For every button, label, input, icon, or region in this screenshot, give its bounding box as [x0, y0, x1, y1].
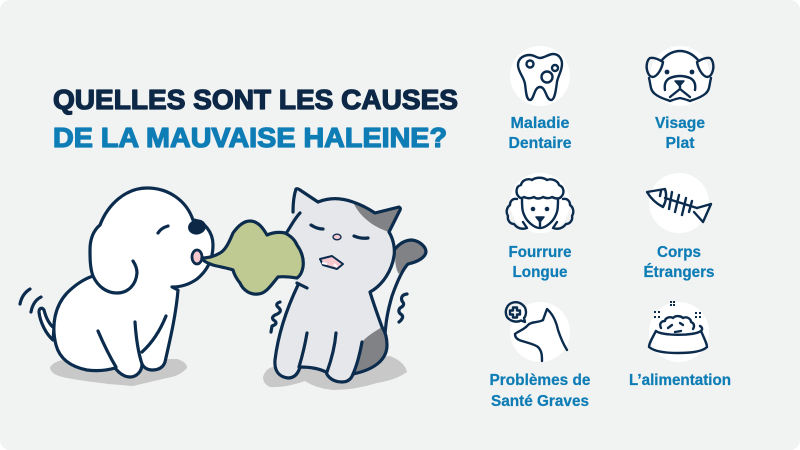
- cat tail: [383, 240, 426, 335]
- icon: tooth: [510, 46, 570, 106]
- label: Corps Étrangers: [644, 244, 715, 281]
- title: QUELLES SONT LES CAUSES: [53, 84, 458, 115]
- title: [53, 84, 458, 153]
- label: Visage Plat: Plat: [666, 135, 695, 152]
- label: Visage Plat: Visage: [655, 115, 705, 132]
- icon: poodle: [507, 173, 573, 233]
- label: Maladie Dentaire: Dentaire: [508, 135, 572, 152]
- icon: fish bone: [647, 173, 711, 233]
- icon: flat-faced dog: [647, 46, 713, 106]
- label: Fourrure Longue: Fourrure: [508, 244, 572, 261]
- label: L'alimentation: L’alimentation: [629, 372, 731, 389]
- cat gray patches: [353, 202, 400, 232]
- icon: dog mouth: [192, 250, 202, 264]
- illustration: cat: [263, 189, 426, 390]
- label: Problèmes de Santé Graves: Santé Graves: [491, 393, 589, 410]
- illustration: bad breath cloud: [202, 221, 303, 294]
- label: Corps Étrangers: Étrangers: [644, 262, 715, 281]
- icon: sick dog with medical cross: [506, 302, 570, 362]
- label: Fourrure Longue: Longue: [512, 264, 568, 281]
- cat body and head: [275, 189, 400, 382]
- label: Visage Plat: [655, 115, 705, 152]
- label: Fourrure Longue: [508, 244, 572, 281]
- illustration: dog: [20, 188, 213, 386]
- icon: dog nose: [187, 218, 207, 236]
- cat face: [311, 225, 368, 269]
- label: Corps Étrangers: Corps: [657, 244, 701, 261]
- label: Maladie Dentaire: Maladie: [510, 115, 570, 132]
- label: Problèmes de Santé Graves: [490, 372, 591, 410]
- label: Problèmes de Santé Graves: Problèmes de: [490, 372, 591, 389]
- title: DE LA MAUVAISE HALEINE?: [53, 122, 447, 153]
- label: Maladie Dentaire: [508, 115, 572, 152]
- icon: food bowl: [649, 301, 709, 362]
